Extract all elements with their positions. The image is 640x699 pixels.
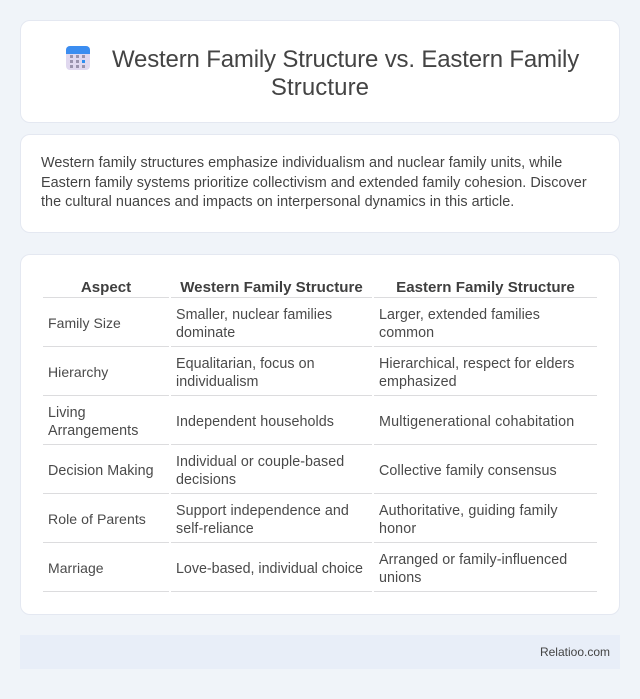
intro text: the cultural nuances and impacts on interpersonal dynamics in this article. [41,194,514,210]
row: Hierarchy: Hierarchical, respect for elders [379,356,574,372]
intro text: Western family structures emphasize individualism and nuclear family units, while [41,155,562,171]
header: Aspect: Aspect [81,279,131,296]
row: Family Size: Larger, extended families [379,307,540,323]
row: Hierarchy: Equalitarian, focus on [176,356,315,372]
intro text: Eastern family systems prioritize collectivism and extended family cohesion. Discover [41,174,587,190]
row: Living Arrangements: Arrangements [48,423,138,439]
row: Hierarchy: individualism [176,374,258,390]
row: Marriage: unions [379,570,421,586]
title: Structure [271,74,369,101]
row: Hierarchy: emphasized [379,374,457,390]
row: Family Size: common [379,325,434,341]
row: Living Arrangements [43,405,597,445]
footer bar [20,635,620,669]
row: Marriage: Arranged or family-influenced [379,552,567,568]
row: Role of Parents: Support independence and [176,503,349,519]
panel: introduction [20,134,620,233]
row: Hierarchy: Hierarchy [48,364,108,380]
panel: title card [20,20,620,123]
row: Living Arrangements: Independent households [176,414,334,430]
row: Decision Making: Individual or couple-based [176,454,344,470]
row: Family Size: Family Size [48,315,121,331]
row: Hierarchy [43,356,597,396]
title: Western Family Structure vs. Eastern Family [112,46,579,73]
row: Role of Parents: honor [379,521,416,537]
row: Decision Making: Collective family consensus [379,463,557,479]
row: Role of Parents [43,503,597,543]
row: Marriage: Love-based, individual choice [176,561,363,577]
footer text: Relatioo.com [540,645,610,659]
icon: calendar [66,46,90,70]
row: Decision Making [43,454,597,494]
intro text [41,155,587,210]
row: Decision Making: Decision Making [48,463,154,479]
row: Family Size [43,307,597,347]
table header [43,297,597,298]
header: Eastern Family Structure: Eastern Family Structure [396,279,575,296]
row: Decision Making: decisions [176,472,236,488]
row: Role of Parents: self-reliance [176,521,254,537]
row: Marriage [43,552,597,592]
row: Family Size: dominate [176,325,235,341]
panel: comparison table [20,254,620,615]
row: Living Arrangements: Living [48,405,86,421]
row: Role of Parents: Role of Parents [48,511,146,527]
title [112,46,580,101]
row: Living Arrangements: Multigenerational cohabitation [379,414,574,430]
header: Western Family Structure: Western Family Structure [180,279,363,296]
row: Role of Parents: Authoritative, guiding family [379,503,558,519]
row: Family Size: Smaller, nuclear families [176,307,332,323]
row: Marriage: Marriage [48,560,104,576]
